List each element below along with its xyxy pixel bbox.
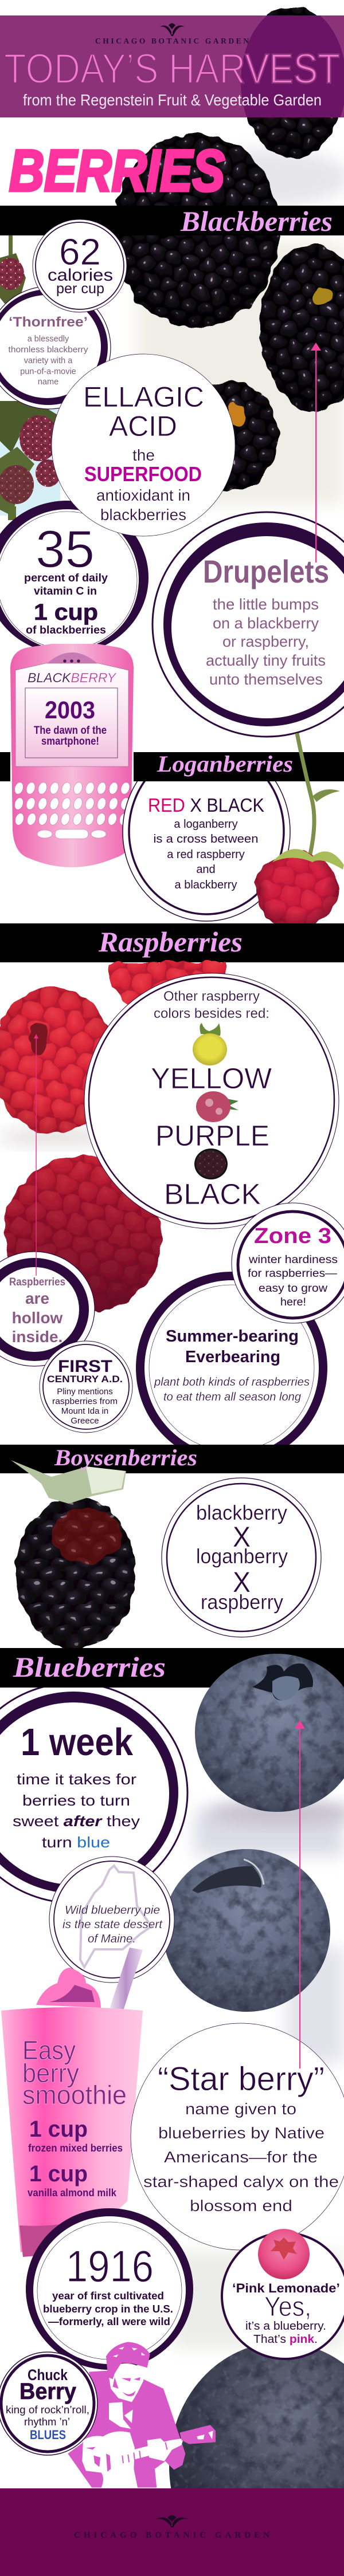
text: Drupelets description: on a blackberry xyxy=(213,615,319,632)
photo: loganberry with stem xyxy=(255,733,344,929)
text: 1 week: 1 week xyxy=(21,1721,134,1764)
text: winter hardiness: winter hardiness xyxy=(248,1253,338,1266)
text: of blackberries: of blackberries xyxy=(26,624,106,636)
logo: footer wings xyxy=(155,2515,189,2527)
heading: Raspberries: Raspberries xyxy=(98,926,243,958)
text: recipe: 1 cup xyxy=(29,2161,88,2186)
text: king of rock 'n' roll: king of rock’n’roll, xyxy=(6,2404,89,2416)
text: loganberry description xyxy=(154,818,258,891)
blackberry phone xyxy=(10,644,134,867)
subtitle: from the Regenstein Fruit & Vegetable Garden xyxy=(23,91,322,109)
callout: blackberry x loganberry x raspberry: X xyxy=(233,1521,251,1553)
text: Drupelets description: unto themselves xyxy=(209,671,323,688)
text: Drupelets description: actually tiny fruits xyxy=(206,652,326,669)
shirt xyxy=(109,2402,133,2429)
photo: top raspberry xyxy=(110,962,225,1010)
blueberry calyx xyxy=(192,1866,261,1893)
callout: Chuck Berry: Berry xyxy=(19,2379,77,2404)
text: 1916: 1916 xyxy=(66,2241,154,2291)
text: star berry description: star-shaped calyx on the xyxy=(143,2173,339,2190)
text: Thornfree name: ‘Thornfree’ xyxy=(9,314,88,330)
text: boysenberry parentage: blackberry xyxy=(196,1501,287,1524)
text: Zone 3: Zone 3 xyxy=(254,1224,331,1248)
text: time to turn sweet: time it takes for xyxy=(17,1771,136,1788)
text: Pliny fact: Greece xyxy=(71,1416,99,1426)
berry xyxy=(255,851,338,929)
text: dawn of the smartphone: The dawn of the xyxy=(34,725,107,737)
text: percent of daily vitamin C: percent of daily xyxy=(24,572,108,584)
callout: blackberry x loganberry x raspberry: X xyxy=(233,1566,251,1598)
photo: lower blueberry xyxy=(163,1849,330,2012)
photo: boysenberry xyxy=(11,1460,135,1648)
band: Raspberries xyxy=(0,923,344,962)
heading: BERRIES: BERRIES xyxy=(9,138,225,203)
photo: large raspberry xyxy=(0,988,115,1146)
callout: Thornfree xyxy=(0,286,111,409)
icon: black raspberry xyxy=(194,1149,228,1179)
text: calories per cup: calories xyxy=(48,266,113,285)
text: Thornfree description: variety with a xyxy=(24,356,73,365)
guitar body xyxy=(82,2431,138,2488)
text: Star berry: “Star berry” xyxy=(158,2060,325,2098)
blackberry phone: smartphone! xyxy=(41,736,99,748)
logo: Chicago Botanic Garden wings xyxy=(159,23,185,36)
photo: pink blueberry xyxy=(258,2229,310,2279)
text: FIRST CENTURY A.D.: FIRST xyxy=(58,1357,112,1376)
photo: top blueberry xyxy=(195,1654,344,1826)
smoothie cup: smoothie xyxy=(22,2080,127,2110)
guitar neck and hand xyxy=(111,2439,183,2465)
callout: Ellagic acid: ACID xyxy=(109,410,177,442)
photo: raspberries xyxy=(0,962,225,1313)
text: winter hardiness: easy to grow xyxy=(259,1282,328,1295)
callout: Drupelets xyxy=(153,512,344,737)
text: recipe: vanilla almond milk xyxy=(28,2187,117,2199)
text: other raspberry colors intro: Other raspberry xyxy=(163,989,260,1004)
text: Yes: Yes, xyxy=(264,2292,311,2322)
arrow: hollow pointer xyxy=(34,1034,38,1276)
band: Loganberries xyxy=(0,751,344,781)
callout: Ellagic acid xyxy=(52,354,235,536)
heading: Blueberries: Blueberries xyxy=(13,1651,166,1683)
text: Easy berry smoothie: Easy xyxy=(22,2035,76,2065)
text: 1 cup: 1 cup xyxy=(34,600,98,625)
callout: 62 calories xyxy=(33,219,127,312)
band: Boysenberries xyxy=(0,1445,344,1473)
text: star berry description xyxy=(143,2100,339,2215)
text: loganberry description: a red raspberry xyxy=(167,848,245,861)
photo: bottom blueberry xyxy=(161,2342,344,2576)
text: winter hardiness: for raspberries— xyxy=(248,1267,338,1280)
number: 35: 35 xyxy=(36,520,95,579)
callout: summer-bearing everbearing: Everbearing xyxy=(185,1348,280,1366)
boysenberry calyx leaves xyxy=(11,1460,126,1504)
text: time to turn sweet: turn blue xyxy=(42,1834,110,1851)
text: Pliny fact: Mount Ida in xyxy=(61,1406,108,1416)
text: ELLAGIC ACID: ELLAGIC xyxy=(83,381,204,413)
text: 2003: 2003 xyxy=(45,697,95,724)
callout: Pink Lemonade xyxy=(222,2229,344,2359)
text: Wild blueberry pie xyxy=(62,1904,163,1945)
text: star berry description: blossom end xyxy=(190,2197,292,2215)
callout: Star berry xyxy=(131,2023,344,2250)
text: winter hardiness: here! xyxy=(280,1296,306,1308)
text: YELLOW: YELLOW xyxy=(151,1062,272,1095)
callout: raspberries are hollow inside: inside. xyxy=(12,1328,62,1346)
callout: raspberries are hollow inside: hollow xyxy=(12,1309,63,1327)
heading: Loganberries: Loganberries xyxy=(157,751,293,777)
text: first cultivated crop: blueberry crop in the U.S. xyxy=(43,2303,173,2315)
callout: Pink Lemonade: That’s pink. xyxy=(253,2333,318,2346)
heading: Boysenberries: Boysenberries xyxy=(54,1445,197,1470)
header band xyxy=(0,15,344,117)
callout: other raspberry colors xyxy=(84,973,339,1229)
icon: Maine outline xyxy=(80,1866,151,1967)
face xyxy=(109,2363,144,2402)
stem xyxy=(297,733,314,856)
callout: 1 week xyxy=(0,1683,187,1903)
photo: hanging berries on the plant xyxy=(0,235,63,520)
callout: blackberry x loganberry x raspberry: loganberry xyxy=(196,1544,288,1568)
background shading behind blackberries xyxy=(138,149,344,504)
phone screen xyxy=(25,688,118,758)
text: BLACK: BLACK xyxy=(164,1178,261,1210)
text: Thornfree description xyxy=(8,335,88,387)
text: Pliny fact xyxy=(52,1387,118,1426)
text: Drupelets description: or raspberry, xyxy=(222,633,309,650)
footer wordmark: CHICAGO BOTANIC GARDEN xyxy=(74,2531,269,2540)
callout: raspberries are hollow inside: are xyxy=(25,1289,49,1307)
guitar headstock xyxy=(179,2425,216,2444)
text: Summer-bearing Everbearing: Summer-bearing xyxy=(166,1327,299,1346)
callout: Zone 3 xyxy=(232,1203,344,1323)
text: time to turn sweet: sweet after they xyxy=(13,1812,140,1830)
photo: top right blackberry xyxy=(243,5,344,159)
text: Chuck Berry: Chuck xyxy=(28,2366,68,2384)
text: star berry description: Americans—for the xyxy=(164,2148,318,2166)
text: Drupelets description xyxy=(206,596,326,688)
text: Thornfree description: a blessedly xyxy=(28,335,69,344)
text: Thornfree description: name xyxy=(38,377,58,387)
callout: Ellagic acid: blackberries xyxy=(100,506,186,524)
icon: yellow raspberry xyxy=(193,1023,227,1065)
leaves xyxy=(272,849,344,870)
illustration: Chuck Berry with guitar xyxy=(68,2342,216,2488)
text: Thornfree description: thornless blackberry xyxy=(8,345,88,355)
straw xyxy=(109,1948,143,2011)
text: first cultivated crop xyxy=(43,2290,173,2327)
photo: central blackberry xyxy=(113,133,279,328)
text: Wild blueberry pie: is the state dessert xyxy=(62,1918,163,1931)
text: loganberry description: is a cross between xyxy=(154,833,258,845)
text: first cultivated crop: —formerly, all were wild xyxy=(48,2316,170,2327)
callout: other raspberry colors: colors besides red: xyxy=(154,1006,269,1021)
callout: 35 percent vitamin C xyxy=(0,501,148,654)
text: RED X BLACK: RED X BLACK xyxy=(148,795,264,816)
text: first cultivated crop: year of first cultivated xyxy=(52,2290,164,2302)
arrow: calyx pointer xyxy=(295,1720,305,2068)
photo: right blackberry xyxy=(260,245,344,411)
text: plant both kinds: plant both kinds of raspberries xyxy=(154,1376,310,1389)
callout: summer-bearing everbearing xyxy=(136,1272,327,1464)
blueberry calyx xyxy=(252,1663,313,1700)
callout: first century A.D. xyxy=(40,1341,132,1433)
jacket silhouette xyxy=(68,2370,185,2488)
text: the: the xyxy=(132,446,155,464)
text: recipe xyxy=(28,2117,123,2199)
heading: Blackberries: Blackberries xyxy=(180,205,333,237)
text: it's a blueberry: it’s a blueberry. xyxy=(245,2320,326,2333)
callout: blackberry x loganberry x raspberry xyxy=(162,1478,321,1637)
text: recipe: 1 cup xyxy=(29,2117,88,2142)
callout: Maine wild blueberry pie xyxy=(49,1857,174,1983)
text: loganberry description: a blackberry xyxy=(175,879,237,891)
callout: Chuck Berry: rhythm ’n’ xyxy=(24,2416,70,2428)
band: Blueberries xyxy=(0,1648,344,1688)
text: Drupelets description: the little bumps xyxy=(213,596,319,613)
number: 62: 62 xyxy=(59,231,101,273)
text: star berry description: blueberries by Native xyxy=(158,2124,325,2142)
text: recipe: frozen mixed berries xyxy=(28,2142,123,2154)
icon: purple raspberry xyxy=(196,1091,239,1122)
callout: Chuck Berry xyxy=(0,2352,97,2455)
text: hollow fact: Raspberries xyxy=(9,1276,65,1288)
callout: 62 calories: per cup xyxy=(56,281,104,297)
logo wordmark: CHICAGO BOTANIC GARDEN xyxy=(95,37,249,45)
boysenberry fruit xyxy=(16,1497,135,1648)
callout: blackberry x loganberry x raspberry: raspberry xyxy=(201,1590,283,1614)
smoothie foam xyxy=(36,1968,101,2008)
text: time to turn sweet: berries to turn xyxy=(22,1792,130,1809)
phone brand: BLACKBERRY xyxy=(28,670,117,685)
text: winter hardiness xyxy=(248,1253,338,1308)
callout: summer-bearing everbearing: to eat them all season long xyxy=(163,1391,301,1403)
cup body xyxy=(1,2007,143,2252)
hair xyxy=(106,2342,150,2379)
text: antioxidant in blackberries: antioxidant in xyxy=(96,486,190,504)
smoothie cup xyxy=(1,1948,143,2257)
text: Pliny fact: Pliny mentions xyxy=(57,1387,113,1397)
text: Wild blueberry pie: Wild blueberry pie xyxy=(65,1904,160,1917)
text: Wild blueberry pie: of Maine. xyxy=(88,1933,136,1945)
arrow: drupelets pointer xyxy=(311,343,321,563)
photo: blackberries xyxy=(113,5,344,491)
callout: 35 percent vitamin C: vitamin C in xyxy=(34,585,97,597)
callout: first century A.D.: CENTURY A.D. xyxy=(47,1374,123,1385)
text: loganberry description: a loganberry xyxy=(174,818,238,831)
text: Pink Lemonade: ‘Pink Lemonade’ xyxy=(232,2281,340,2295)
background shading behind blueberries xyxy=(172,1810,344,2349)
footer xyxy=(0,2488,344,2576)
text: BLUES: BLUES xyxy=(30,2428,66,2442)
text: loganberry description: and xyxy=(196,863,216,876)
smoothie cup: berry xyxy=(22,2058,79,2088)
band: Blackberries xyxy=(0,205,344,237)
callout: raspberries are hollow inside xyxy=(0,1252,95,1366)
text: PURPLE: PURPLE xyxy=(155,1119,269,1152)
text: Thornfree description: pun-of-a-movie xyxy=(20,367,76,376)
callout: red x black loganberry xyxy=(122,781,291,922)
text: SUPERFOOD: SUPERFOOD xyxy=(84,462,202,486)
photo: lower raspberry xyxy=(4,1155,162,1313)
blackberry tinted through the band xyxy=(241,15,344,117)
callout: 1916 xyxy=(26,2208,193,2370)
text: time to turn sweet xyxy=(13,1771,140,1851)
phone earpiece arch xyxy=(46,652,99,664)
phone keyboard xyxy=(13,781,131,839)
raspberry hollow xyxy=(30,1024,48,1056)
text: star berry description: name given to xyxy=(185,2100,296,2118)
text: Pliny fact: raspberries from xyxy=(52,1397,118,1406)
photo: lower blackberry xyxy=(181,380,278,491)
